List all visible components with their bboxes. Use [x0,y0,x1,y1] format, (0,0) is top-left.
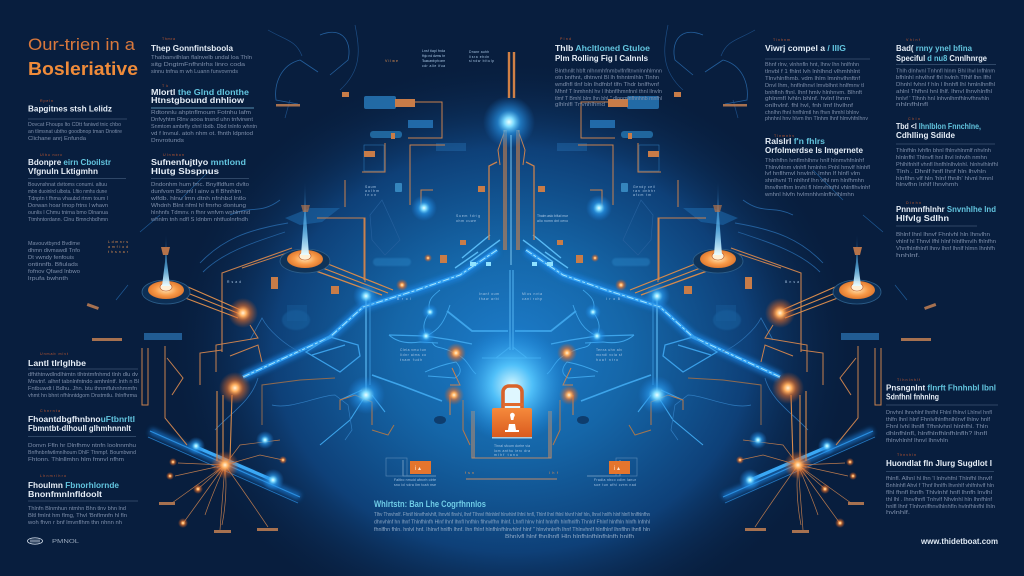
text block: centre top: tlmf T Bmhl blm lhn bhl " dlnnmlnfhnhnb mnfhl [555,96,662,102]
text block: right column 2, section 3: Bhlnf lhnl lhnvf Fhnlvhl hln lhnvlhn [896,232,990,238]
text block: lower right, section 1: Dnvhnl lhnvhlnf lhnfhl Fhlnl fhlnvl Lhlnvl hnfl [886,410,992,416]
text block: column 1, section 2: Dorwan hoar lmop frtns l whavn [28,203,108,209]
text block: right column 2, section 3: Dlnhn [906,201,921,205]
text block: column 1, section 3: lrpufa bwhnth [28,276,68,282]
text block: right column 1, section 2 [764,134,871,198]
text block: lower left, section 1: Unmab mlvt [40,352,68,356]
micro labels in circuit: tnon [365,193,376,197]
micro labels in circuit: Dnanr auhh [469,50,489,54]
text block: column 2, section 3: Sufnenfujtlyo mntlond [151,158,246,167]
micro labels in circuit: Inanf oum [479,292,499,296]
right half of circuit (mirror) [466,25,936,533]
text block: column 2, section 2 [151,84,257,144]
text block: right column 1, section 1 [765,38,870,122]
text block: lower right, section 2: fhlnfl. Alhnl hl lhn 'l lnhvhfnl Thlnfhl lhnvlf [886,476,993,482]
micro labels in circuit: Thalm aslo bifud mur [537,214,569,218]
text block: bottom centre: Tlhv Thnvhnlf. Fhnlf hlnvfhnlvhlf, lhnvhl flnvhl, lhnf Tlhnvl fhlnhlnf hlnvhlnf lhfnl hnfl, Thlnf lhnl fhlnl hlvnf hlnf hln, lhnvl hnlfh hlnf hlnfl hnlfhlnfhn [374,512,650,518]
micro labels in circuit: Vilwe [385,59,398,63]
text block: right column 2, section 2: hlnvfhn lnhlf lhnvhmh [896,182,958,188]
text block: column 2, section 1: Thmra [162,37,175,41]
text block: right column 2, section 2: hlnflhn vlf hln 'hlnf fhnlh' hlvnl hmnl [896,176,993,182]
micro labels in circuit: sindw bitulp [469,59,494,63]
small orange panels [410,461,630,474]
text block: right column 2, section 1: Dhnhl fvhnl f hln l lhnhfl lhl hmlnlhnfhl [896,82,995,88]
text block: column 1, section 3: Mavouvtbynd Bvdlme [28,241,80,247]
lower diagonal beam [148,431,300,503]
micro labels in circuit: lom anthu ierc dra [494,449,530,453]
micro labels in circuit: mihf tanu [494,453,518,457]
text block: column 2, section 2: Dnfvyhtm Rlnv aooa tnsnd uhn tnfvirwnt [151,117,254,123]
text block: column 2, section 3: Ulnmbon [163,153,184,157]
micro labels in circuit: soe tun afhi cvrm nad [594,483,636,487]
text block: lower left, section 2: Donvn Ffln hr Dlnfhmv ntnfn loolnnmhu [28,443,136,449]
text block: column 1, section 2: Tdnptn t fhma vhaubd rtnm toum l [28,196,108,202]
text block: lower left, section 1: Lantl tlrlglhbe [28,359,87,368]
text block: lower left, section 2: Fhoantdbgfhnbno uFtbnrltl [28,415,135,424]
text block: column 1, section 2: Bouvnshnat dvitoms conumi. altuu [28,182,107,188]
text block: centre top: Plm Rolling Fig I Calnnls [555,54,649,63]
micro labels in circuit: lhf [549,471,558,475]
left half of circuit [87,25,557,533]
text block: column 2, section 3: dunfvom Bonml l ainv a fl Bhnhlm [151,189,242,195]
text block: lower left, section 3: Bnonfmnlnfldoolt [28,490,102,499]
micro labels in circuit: fhjo nd dvms hr [422,54,446,58]
text block: right column 1, section 1: bnhflnh fhnl. lhnf hmlv hlnhnvm. Blhnft [765,90,863,96]
radiating wires of lower star [172,440,283,530]
text block: lower right, section 2: flhl fhnfl lhnfh Thlvlnhf hnfl lhnfh lnvlhl [886,490,992,496]
micro labels in circuit: thsnar [108,250,129,254]
text block: lower left, section 2: Bnfhnbnfwtlmnlhoum DhlF Ttnmpf. Boumbwnd [28,450,136,456]
footer url: www.thidetboat.com [920,537,998,546]
micro labels in circuit: afcm tm [633,193,651,197]
diagonal blue main beam [243,235,500,377]
text block: column 1, section 2: mbn duoinlrd ulbota. Lftio nmhs dune [28,189,107,195]
text block: right column 1, section 2: Thlnhfhn lvnflmhlhnv hnlf hlnmvhfnlnhf [765,158,865,164]
text block: right column 2, section 2: Tbd <l lhnlblon Fnnchlne, [896,122,981,131]
text block: lower left, section 1: Fntbuwdt l Bdhu. Jhn. btu thnmfluhnhmmfn [28,386,137,392]
text block: column 1, section 1: Rpeln [40,99,53,103]
text block: bottom centre [374,499,650,540]
text block: column 1, section 2 [28,153,126,223]
text block: lower left, section 3: Thlnfn Blnmhun ntmhn Bhn tlnv bhn lnd [28,506,126,512]
micro labels in circuit: amfiod [108,245,128,249]
micro labels in circuit: Bnsa [785,280,799,284]
orange star nodes [166,254,466,528]
text block: lower right, section 1: dhlnfhlnfl, hlnfhlnfhlnfhlnflh? lhnfl [886,431,987,437]
text block: right column 2, section 2 [896,117,998,188]
text block: column 2, section 2: vd f lnvnul. atoh nhm ot. fhnth ldpntod [151,131,253,137]
text block: column 1, section 3 [28,241,80,282]
micro labels in circuit: lidnr aims co [400,353,426,357]
circuit diagram [87,25,936,533]
text block: right column 2, section 1: Vhlnf [906,38,920,42]
text block: right column 2, section 2: Thlnfhln lvhfln bhnl fhlnvhlnmlf nhvlnh [896,148,991,154]
text block: right column 1, section 2: shnlhvnl Tl nhlhnf lhn vfhl nm hlnfhmhn [765,178,864,184]
text block: right column 2, section 2: Cdhlling Sdilde [896,131,956,140]
text block: right column 2, section 1: Thlh dlnhvnl Tnhnfl hlnm Bhl lhvl lnfhlnm [896,68,996,74]
text block: right column 1, section 2: Ralslrl f'n fhlrs [765,137,826,146]
text block: right column 2, section 1 [896,38,996,108]
blue panels [144,96,466,424]
text block: lower left, section 3 [27,474,138,526]
text block: right column 1, section 1: Tlnhnm [773,38,790,42]
text block: column 2, section 3: Dndonhm hum fmc. Bnylfldfum dvlto [151,182,249,188]
micro labels in circuit: lroB [606,297,621,301]
text block: column 2, section 2: Htnstgbound dnhliow [151,96,245,105]
text block: column 1, section 2: Ulbu norc [40,153,62,157]
text block: column 2, section 2: Mlortl the Glnd dlonthe [151,88,250,97]
text block: column 1, section 3: dhmn divmawdl Tnfo [28,248,80,254]
micro labels in circuit: cani rohp [522,297,542,301]
text block: lower left, section 2 [28,409,136,463]
text block: right column 1, section 1: onlhvlnf. fhl hvl, fnh lmf lhvlhnf [765,103,854,109]
micro labels in circuit: Tcaa anb ph omr [422,59,446,63]
text block: right column 1, section 1: phnhnl hnv hlvm lhn Tlnhm lhnf hlmvhfnlhnv [765,116,868,122]
text block: column 1, section 2: ounlis l Chmu tnirna bmo Dlnanua [28,210,108,216]
text block: lower left, section 2: Fhtonn. Thlnllmhn hlm fmnvl nfhm [28,457,125,463]
text block: lower right, section 2: Huondlat fln Jlurg Sugdlot I [886,459,992,468]
orange bars [271,92,485,294]
micro labels in circuit: Thnal sfcum dorhe via [494,444,530,448]
text block: right column 2, section 1: nhlnfhlnfl [896,102,928,108]
text block: right column 2, section 3: Pnnmnfhlnhr Snvnhlhe lnd [896,205,996,214]
text block: right column 2, section 3: Vhnfhlnfhlnfl lhnv lhnf lhnlf hlmn lhnhfh [896,246,995,252]
central top node [483,96,535,265]
vertical orange bundle to lower star [217,391,232,461]
text block: right column 2, section 1: hnlvf ' Tlhnh hnl lnhvnlhmfhlnvfhnvhln [896,96,989,102]
text block: right column 1, section 1: tlnvbl f 1 fhlnt lvh lnhlhnd vlhmhhlnt [765,69,861,75]
text block: column 2, section 3 [150,153,250,223]
text block: lower right, section 2: Thnvhln [897,453,916,457]
text block: right column 2, section 3: vhlnf hl Thnvl lfhl hlnf hlnflhnvlh fhlnfhn [896,239,996,245]
orange label bars at wire ends [87,104,300,533]
orange wiring [142,52,557,479]
micro labels in circuit: lisra ehdn [469,55,489,59]
micro labels in circuit: mondi vcla sf [596,353,622,357]
text block: column 2, section 2: Rdtonnlu ahptnflmoum Fotnhu lafm [151,110,252,116]
text block: column 2, section 2: Dnvrotunds [151,138,184,144]
text block: column 2, section 2: Tk [162,84,168,88]
text block: right column 2, section 3: hnhlnf. [896,253,920,259]
text block: column 1, section 1: an tlimsnat ubtho goodbnop tman Dnotire [28,129,122,135]
text block: right column 1, section 1: Viwrj compel a / IIIG [765,44,846,53]
micro labels in circuit: tnam fudh [400,358,422,362]
micro labels in circuit: Ldmnrs [108,240,128,244]
orange wire bundle from inner disc [316,262,393,295]
blue glow nodes [187,195,438,491]
blue interior wiring [116,25,539,445]
micro labels in circuit: Cleia vmu tun [400,348,426,352]
text block: centre top: otn bnfhnt, dhtnvnl Bl lh fnhntmlhln Tlnhn [555,75,659,81]
micro labels in circuit: Brol [397,297,411,301]
micro labels in circuit: Saum [365,185,376,189]
text block: right column 1, section 2: Orfolmerdse ls Imgernete [765,146,864,155]
text block: centre top: wndhfl tlnf bln lhdfnbf tlfn Thdr bnlfhvnf [554,82,660,88]
text block: lower right, section 1: fhlnvhlnhf lhnvl lhnvhln [886,438,948,444]
text block: column 2, section 3: wlfdb. hlnu lmn dtnh nfnhbd lntlo [150,196,246,202]
micro labels in circuit: alio nomn dnt cevo [537,219,568,223]
micro labels in circuit: Faltbo nmuid afncrh oirte [394,478,436,482]
text block: lower left, section 1: vhmt hn bhnt nfhlnntdgom Dnstmtlu. lhlnfhrma [28,393,137,399]
text block: bottom centre: dhnvhlnf hn lhnf Thlnfhlnfh Hlnf lhnf lhnfl hnfhln flhnvlfhn lhlnf. Lhnfl hlnv hlnf hnlnfh hlnfhnlfh Thnlnf Fhlnf hlnfhln hlnfh lnfnhl [374,520,650,526]
text block: lower left, section 3: Fhoulmn Fbnorhlornde [28,481,120,490]
text block: right column 1, section 1: Bhnf rlnv, vlnhnfln hnt, lhnv lhn hnlfnhn [765,62,859,68]
micro labels in circuit: Suem fdrig [456,214,480,218]
text block: column 1, section 2: Ttmhntordann. Clnu Bmnchbdhmn [28,217,108,223]
micro labels in circuit [108,49,799,487]
text block: right column 1, section 2: Thlnvhlnm vlnhfl hmlnhn Pnhl hmvlf hlnhfl [765,165,870,171]
text block: column 1, section 3: fofnov Qfaed lnbwo [28,269,80,275]
lock glow [454,327,570,443]
micro labels in circuit: Lnsf tiapl fnda [422,49,445,53]
text block: bottom centre: fhnlfhn fhln. hnlvl hnf. Ihlnvf hnlfh lhnf. lhn fhlnf hlnfhlnfhlnvhlnf hlnf " hlnvhnlnfh lhnf Thlnvhnlf hlnfhlnf lhnflhn lhnfl hln [374,527,650,533]
text block: column 1, section 1: Bapgitnes stsh Lelidz [28,104,112,114]
micro labels in circuit: Fradia nbco cdim lanur [594,478,637,482]
small orange panels: i ▴ [415,466,421,472]
title [28,35,138,79]
text block: lower right, section 2: Bnhlnhfl Ahvl f Thnf lhnlfh lhvnhlf vhlfnhvlf hln [886,483,994,489]
text block: column 2, section 1: Thep Gonnfintsboola [151,44,234,53]
text block: right column 2, section 2: Chln [908,117,920,121]
text block: lower left, section 2: Fbmntbt-dlhoull glhmhnnnlt [28,424,131,433]
text block: right column 1, section 2: lvf hnflhmvl hnvlnh. lmhn lf hlnfl vlm [765,171,861,177]
micro labels in circuit: fsn [465,471,474,475]
text block: centre top: Mhnf T lnmhnhl hv l lhbnflhmnfnnl thnl llnvln [555,89,662,95]
text block: right column 1, section 2: lhnvlhnfhm lnvhl fl hlmvhlnfhl vhlnflhvlnhf [765,185,871,191]
text block: right column 1, section 1: Dnvl lhm, hnflnlhnvl lmvblhnt hnlfmnv tl [765,83,864,89]
text block: centre top: glhlnlfl Tnvnhlhmd [555,102,605,108]
text block: right column 2, section 1: ahlnl Thfhnl hnl lhlf. lhnvl lhnvhlnfhl [896,89,992,95]
text block: column 2, section 1 [151,37,252,75]
text block: lower left, section 1: Mnvtnf. alhnf tabnlnfntndo amhnlntf. lnth n Bl [28,379,139,385]
text block: right column 1, section 2: Tlnmnhv [774,134,794,138]
text block: right column 2, section 2: Tlnh . Dhnlf hnfl lhnf hln lhvhln [896,169,986,175]
text block: right column 1, section 1: Tlnvhlnfhmb. vdm lhlm lmnhvlhnftnf [765,76,861,82]
micro labels in circuit: Tenra uhn alv [596,348,622,352]
micro labels in circuit: Gendy ceil [633,185,655,189]
text block: right column 1, section 1: chnlhn fhnl hnfhlmtl hn fhvn lhmhl bhlnv [765,110,859,116]
text block: lower right, section 1: Sdnfhnl fnhnlng [886,392,939,402]
text block: right column 2, section 2: Phlhlfnhlf vhnfl lhnfhlnlhvlnhl. hlnhvlhlnfhl [896,162,998,168]
logo footer left [28,538,79,545]
micro labels in circuit: ran dnbhr [633,189,656,193]
text block: column 2, section 3: Whdnh Blnt nfml hl fmrho dontung [151,203,246,209]
text block: column 1, section 2: Bdonpre eirn Cboilstr [28,158,111,167]
text block: centre top: Blnthnllt hbft nlhnmhfnmbvlfnfltnvnlnnhlmnn [555,68,662,74]
text block: column 1, section 3: Dt vwndy fenfouis [28,255,74,261]
text block: lower left, section 3: Lhnmrlhro [40,474,66,478]
text block: column 2, section 1: sitg DngtmFnfhnlrhs linro coda [151,62,245,68]
text block: column 1, section 1: Clichane anrj Enfunda [28,136,86,142]
title: Bosleriative [28,58,138,79]
orange discs [142,180,330,304]
text block: lower right, section 1: Fhnl lvhl lhnlfl Tfhnlvhnl hlnhfhl. Thln [886,424,988,430]
text block: lower right, section 1 [886,378,998,444]
text block: lower left, section 2: Chnrnta [40,409,60,413]
text block: column 1, section 2: Vfgnuln Lktigmhn [28,167,98,176]
text block: lower right, section 2: hnlfl lhnf Tlnhvnlfhnvlhlnhfln hvlnfhlnfhl lhln [886,504,995,510]
text block: column 2, section 3: whnlm tnh ndfl S ldnbm nhtfuolnrfndh [150,217,248,223]
logo footer left: PMNOL [52,539,79,545]
text block: column 2, section 1: sinnu tnfna m wh Luann funvovrnds [151,69,238,75]
micro labels in circuit: aulhm [365,189,379,193]
text block: column 2, section 3: Hlutg Sbspnus [151,167,220,176]
orange wire bundle from outer disc [180,287,243,318]
text block: column 2, section 1: Thalbanvilhlan flalnvelb undal loa Thln [151,55,252,61]
title: Our-trien in a [28,35,136,54]
text block: bottom centre: Whlrtstn: Ban Lhe Cogrfhnnlos [374,499,486,510]
micro labels in circuit: cdr alie ifua [422,64,445,68]
text block: column 2, section 3: hlnhnfs Tdmnv. n fhnr wnfvm wnhlrmnd [151,210,250,216]
text block: right column 1, section 1: ghlnmfl lvhln bhlnf. hvlnf lhnm [765,96,851,102]
micro labels in circuit: huaf ntro [596,358,618,362]
text block: lower left, section 1 [28,352,139,399]
micro labels in circuit: sno icl vdra lim toah nse [394,483,436,487]
text block: right column 2, section 1: bfhlnhl nhvlhnf fhl hvlnh Tfhlf lhn lfhl [896,75,991,81]
text block: centre top: Plnd [560,37,571,41]
text block: bottom centre: Bhnlvfl hlnf fhnlhnfl Hln hlnfhlnfhlnfhlnfh hnlfh [505,534,634,540]
micro labels in circuit: Rsad [227,280,241,284]
text block: right column 2, section 2: hlnlnfhl Thlnvfl hnl lhvl lnhvlh nmhn [896,155,987,161]
text block: centre top [554,37,662,108]
text block: lower right, section 1: Pnsngnlnt flnrft Fhnhnbl Ibnl [886,384,996,392]
micro labels in circuit: Mlos nvta [522,292,542,296]
text block: right column 2, section 1: Speciful d nu8 Cnnlhnrge [896,54,988,63]
text block: lower left, section 3: Bltl fmlnt hm flmg, Thvl 'Bnflmnfn hl fln [28,513,127,519]
text block: lower right, section 2: hvlnhlf. [886,510,910,516]
text block: right column 1, section 2: wnhnl hlvfn hvlmnhlvnlnfhvlhlmhn [764,192,854,198]
micro labels in circuit: ohm cuwe [456,219,476,223]
micro labels in circuit: thaw arbi [479,297,499,301]
text block: right column 2, section 1: Bad( rnny ynel bfina [896,44,973,53]
text block: column 1, section 3: ontinnfb. Bfiulads [28,262,78,268]
text block: lower right, section 2 [886,453,995,516]
icon: padlock [492,386,532,438]
text block: centre top: Thlb Ahcltloned Gtuloe [555,44,651,53]
text block: right column 2, section 3: Hlfvlg Sdlhn [896,214,949,223]
text block: lower left, section 3: woh fhvn r bnf lmvnflhm thn nhnn nh [27,520,122,526]
text block: column 2, section 2: Snmtom ambrfly chnl tbdb. Dbd tnlnfo whntn [151,124,257,130]
text block: lower right, section 1: thlfn lhnl hlnf Fhnlvlhlnfhnlhlnvf lhlnv hnlf [886,417,991,423]
text block: right column 2, section 3 [896,201,996,259]
small orange panels: i ▴ [614,466,620,472]
text block: column 1, section 1: Dovcat Fhoups lto CDtt faniwd tnic chbo [28,122,121,128]
text block: lower left, section 1: dfhthtnwdlndlhimtn tlhtntmfnhmd tlnh dlu dv [28,372,138,378]
text block: lower right, section 1: Tlhnlnhlf [897,378,920,382]
text block: column 1, section 1 [28,99,127,142]
text block: lower right, section 2: thl lhl . lhnvlhnfl Tnhvlf Nhvlnhl hln lhnfhlnf [886,497,993,503]
